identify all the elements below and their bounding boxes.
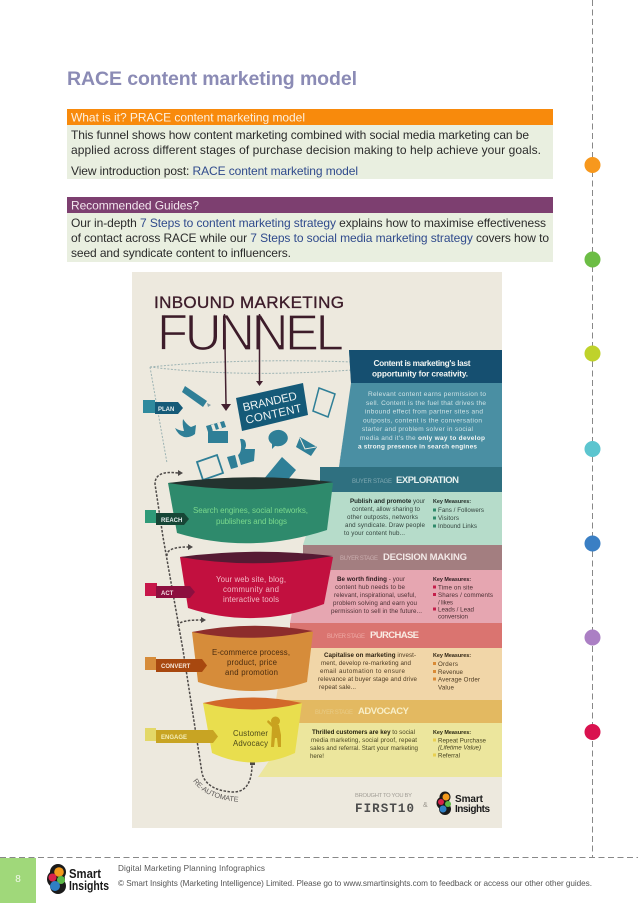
stage label: convert xyxy=(145,657,207,672)
teal info panel: inbound effect from partner sites and xyxy=(365,408,483,416)
stage: decision making: Key Measures: xyxy=(433,577,471,583)
stage: advocacy: Referral xyxy=(438,752,460,760)
heading: what is it bar xyxy=(67,109,553,125)
footer logo xyxy=(47,864,109,894)
funnel: reach: Search engines, social networks, xyxy=(193,506,308,515)
stage: exploration: BUYER STAGE xyxy=(352,479,392,485)
stage: purchase: ment, develop re-marketing and xyxy=(321,660,412,667)
stage: decision making: permission to sell in the future... xyxy=(331,608,422,615)
stage: exploration: Publish and promote your xyxy=(350,498,425,505)
stage: exploration: and syndicate. Draw people xyxy=(345,522,426,529)
teal info panel xyxy=(339,350,502,467)
dotted funnel outline xyxy=(150,361,352,463)
panel: what is it xyxy=(67,109,553,179)
stage: exploration: Inbound Links xyxy=(438,523,477,530)
stage: purchase: Value xyxy=(438,684,455,692)
funnel: reach: publishers and blogs xyxy=(216,517,287,526)
teal info panel: a strong presence in search engines xyxy=(358,444,477,450)
footer text: © Smart Insights (Marketing Intelligence) Limited. Please go to www.smartinsights.com to feedback or access our other other guides. xyxy=(118,879,592,888)
icon: person xyxy=(267,716,281,747)
poster title: INBOUND MARKETING xyxy=(154,293,344,312)
stage: exploration: Fans / Followers xyxy=(438,507,484,514)
logo: smart insights (poster) xyxy=(436,792,490,815)
stage: purchase: Key Measures: xyxy=(433,653,471,659)
funnel: act: interactive tools xyxy=(223,595,279,604)
teal info panel: Content is marketing's last xyxy=(374,358,471,368)
stage: advocacy: sales and referral. Start your marketing xyxy=(310,745,419,752)
branded content badge: BRANDED xyxy=(242,391,298,414)
icon: tablet xyxy=(263,457,296,487)
icon: clapperboard xyxy=(206,421,228,443)
stage: decision making: Time on site xyxy=(438,584,474,592)
funnel: engage xyxy=(203,698,302,762)
re-automate label: RE-AUTOMATE xyxy=(193,778,238,802)
stage: decision making: Be worth finding - your xyxy=(337,576,405,583)
stage: purchase: BUYER STAGE xyxy=(327,634,365,640)
stage: advocacy: media marketing, social proof, repeat xyxy=(311,737,417,744)
text block: funnel description: View introduction post: RACE content marketing model xyxy=(71,164,358,178)
stage: exploration: Key Measures: xyxy=(433,499,471,505)
stage label: plan: PLAN xyxy=(158,407,174,413)
stage: decision making: / likes xyxy=(438,600,453,606)
stage: purchase: Capitalise on marketing invest- xyxy=(324,652,416,659)
stage label: reach: REACH xyxy=(161,518,182,524)
panel: recommended guides xyxy=(67,197,553,262)
text block: funnel description: applied across different stages of purchase decision making to help achieve your goals. xyxy=(71,143,541,157)
stage: decision making: problem solving and earn you xyxy=(333,600,418,607)
stage: advocacy: here! xyxy=(310,753,324,760)
footer text: Digital Marketing Planning Infographics xyxy=(118,864,265,873)
teal info panel: sell. Content is the fuel that drives the xyxy=(366,400,486,407)
text block: guides description: of contact across RACE while our 7 Steps to social media marketing strategy covers how to xyxy=(71,231,549,245)
icon: pencil xyxy=(182,386,211,407)
stage: advocacy: Key Measures: xyxy=(433,730,471,736)
stage: advocacy: BUYER STAGE xyxy=(315,710,353,716)
stage: advocacy: Thrilled customers are key to social xyxy=(312,729,415,736)
funnel: act: community and xyxy=(223,585,279,594)
stage label: engage xyxy=(145,728,218,743)
stage label: plan xyxy=(143,400,183,414)
stage: purchase: relevance at buyer stage and drive xyxy=(318,676,418,683)
stage: advocacy xyxy=(258,700,502,777)
icon: envelope xyxy=(296,437,317,456)
funnel: act: Your web site, blog, xyxy=(216,575,286,584)
poster credits xyxy=(355,792,490,816)
text block: guides description xyxy=(71,216,549,260)
poster credits: BROUGHT TO YOU BY xyxy=(355,793,412,799)
stage: advocacy: Repeat Purchase xyxy=(438,738,487,744)
stage label: act: ACT xyxy=(161,591,174,597)
poster credits: & xyxy=(423,802,428,809)
stage label: reach xyxy=(145,510,189,525)
stage: exploration: Visitors xyxy=(438,515,459,522)
logo: smart insights (poster): Insights xyxy=(455,804,490,815)
funnel arrows from title xyxy=(221,314,263,411)
stage: advocacy: (Lifetime Value) xyxy=(438,744,481,752)
funnel: convert: and promotion xyxy=(225,668,278,677)
text block: funnel description: This funnel shows how content marketing combined with social media marketing can be xyxy=(71,128,529,142)
stage: exploration: to your content hub... xyxy=(344,530,405,537)
stage: decision making: conversion xyxy=(438,614,469,620)
stage: purchase: Average Order xyxy=(438,676,480,684)
path arrowheads xyxy=(178,470,255,765)
stage: exploration: content, allow sharing to xyxy=(352,506,421,513)
icon: phone xyxy=(313,388,335,417)
stage: decision making: content hub needs to be xyxy=(335,584,406,591)
icon: bird xyxy=(175,419,196,437)
footer page number: 8 xyxy=(15,874,21,885)
teal info panel: Relevant content earns permission to xyxy=(368,391,486,398)
stage: purchase: PURCHASE xyxy=(370,630,419,641)
stage: purchase: repeat sale... xyxy=(319,684,356,691)
footer logo: Smart xyxy=(69,866,102,881)
branded content badge xyxy=(236,383,308,431)
stage label: engage: ENGAGE xyxy=(161,735,187,741)
icon: picture frame xyxy=(197,455,223,480)
dotted re-automate path xyxy=(155,472,252,792)
footer text xyxy=(118,864,592,888)
infographic: inbound marketing funnel poster xyxy=(132,272,502,828)
funnel: reach xyxy=(168,477,333,543)
stage: decision making: BUYER STAGE xyxy=(340,556,378,562)
stage: purchase: Revenue xyxy=(438,669,464,676)
heading: recommended guides bar: Recommended Guides? xyxy=(71,198,199,212)
icon: thumbs up xyxy=(227,439,255,469)
text block: funnel description xyxy=(71,128,541,178)
funnel: convert: E-commerce process, xyxy=(212,648,290,657)
stage: exploration: EXPLORATION xyxy=(396,475,459,486)
stage: decision making: relevant, inspirational, useful, xyxy=(334,592,416,599)
stage: purchase xyxy=(276,623,502,700)
funnel: engage: Customer xyxy=(233,729,268,738)
stage: decision making xyxy=(290,545,502,623)
stage: exploration xyxy=(303,467,502,545)
timeline dots xyxy=(584,157,600,740)
footer logo: Insights xyxy=(69,878,109,893)
text block: guides description: Our in-depth 7 Steps to content marketing strategy explains how to maximise effectiveness xyxy=(71,216,546,230)
icon: speech bubble xyxy=(268,430,288,449)
funnel: act xyxy=(180,552,333,618)
stage: purchase: email automation to ensure xyxy=(320,668,406,675)
stage: decision making: DECISION MAKING xyxy=(383,552,467,563)
branded content badge: CONTENT xyxy=(245,403,303,427)
stage: advocacy: ADVOCACY xyxy=(358,706,410,717)
heading: recommended guides bar xyxy=(67,197,553,213)
text block: guides description: seed and syndicate content to influencers. xyxy=(71,246,291,260)
poster credits: FIRST10 xyxy=(355,802,414,816)
content icons xyxy=(175,386,335,487)
teal info panel: opportunity for creativity. xyxy=(372,368,468,378)
stage label: convert: CONVERT xyxy=(161,664,191,670)
teal info panel: outposts, content is the conversation xyxy=(363,417,482,424)
stage: decision making: Leads / Lead xyxy=(438,606,475,614)
stage label: act xyxy=(145,583,195,598)
funnel: convert xyxy=(192,626,313,691)
footer page number xyxy=(0,858,36,903)
teal info panel: media and it's the only way to develop xyxy=(360,435,485,442)
teal info panel: starter and problem solver in social xyxy=(362,426,474,433)
heading: what is it bar: What is it? PRACE content marketing model xyxy=(71,110,305,124)
funnel: engage: Advocacy xyxy=(233,739,268,748)
funnel: convert: product, price xyxy=(227,658,277,667)
stage: decision making: Shares / comments xyxy=(438,592,493,599)
poster title: FUNNEL xyxy=(157,304,344,361)
stage: exploration: other outposts, networks xyxy=(347,514,418,521)
title: RACE content marketing model xyxy=(67,68,357,90)
logo: smart insights (poster): Smart xyxy=(455,794,484,805)
stage: purchase: Orders xyxy=(438,661,458,668)
